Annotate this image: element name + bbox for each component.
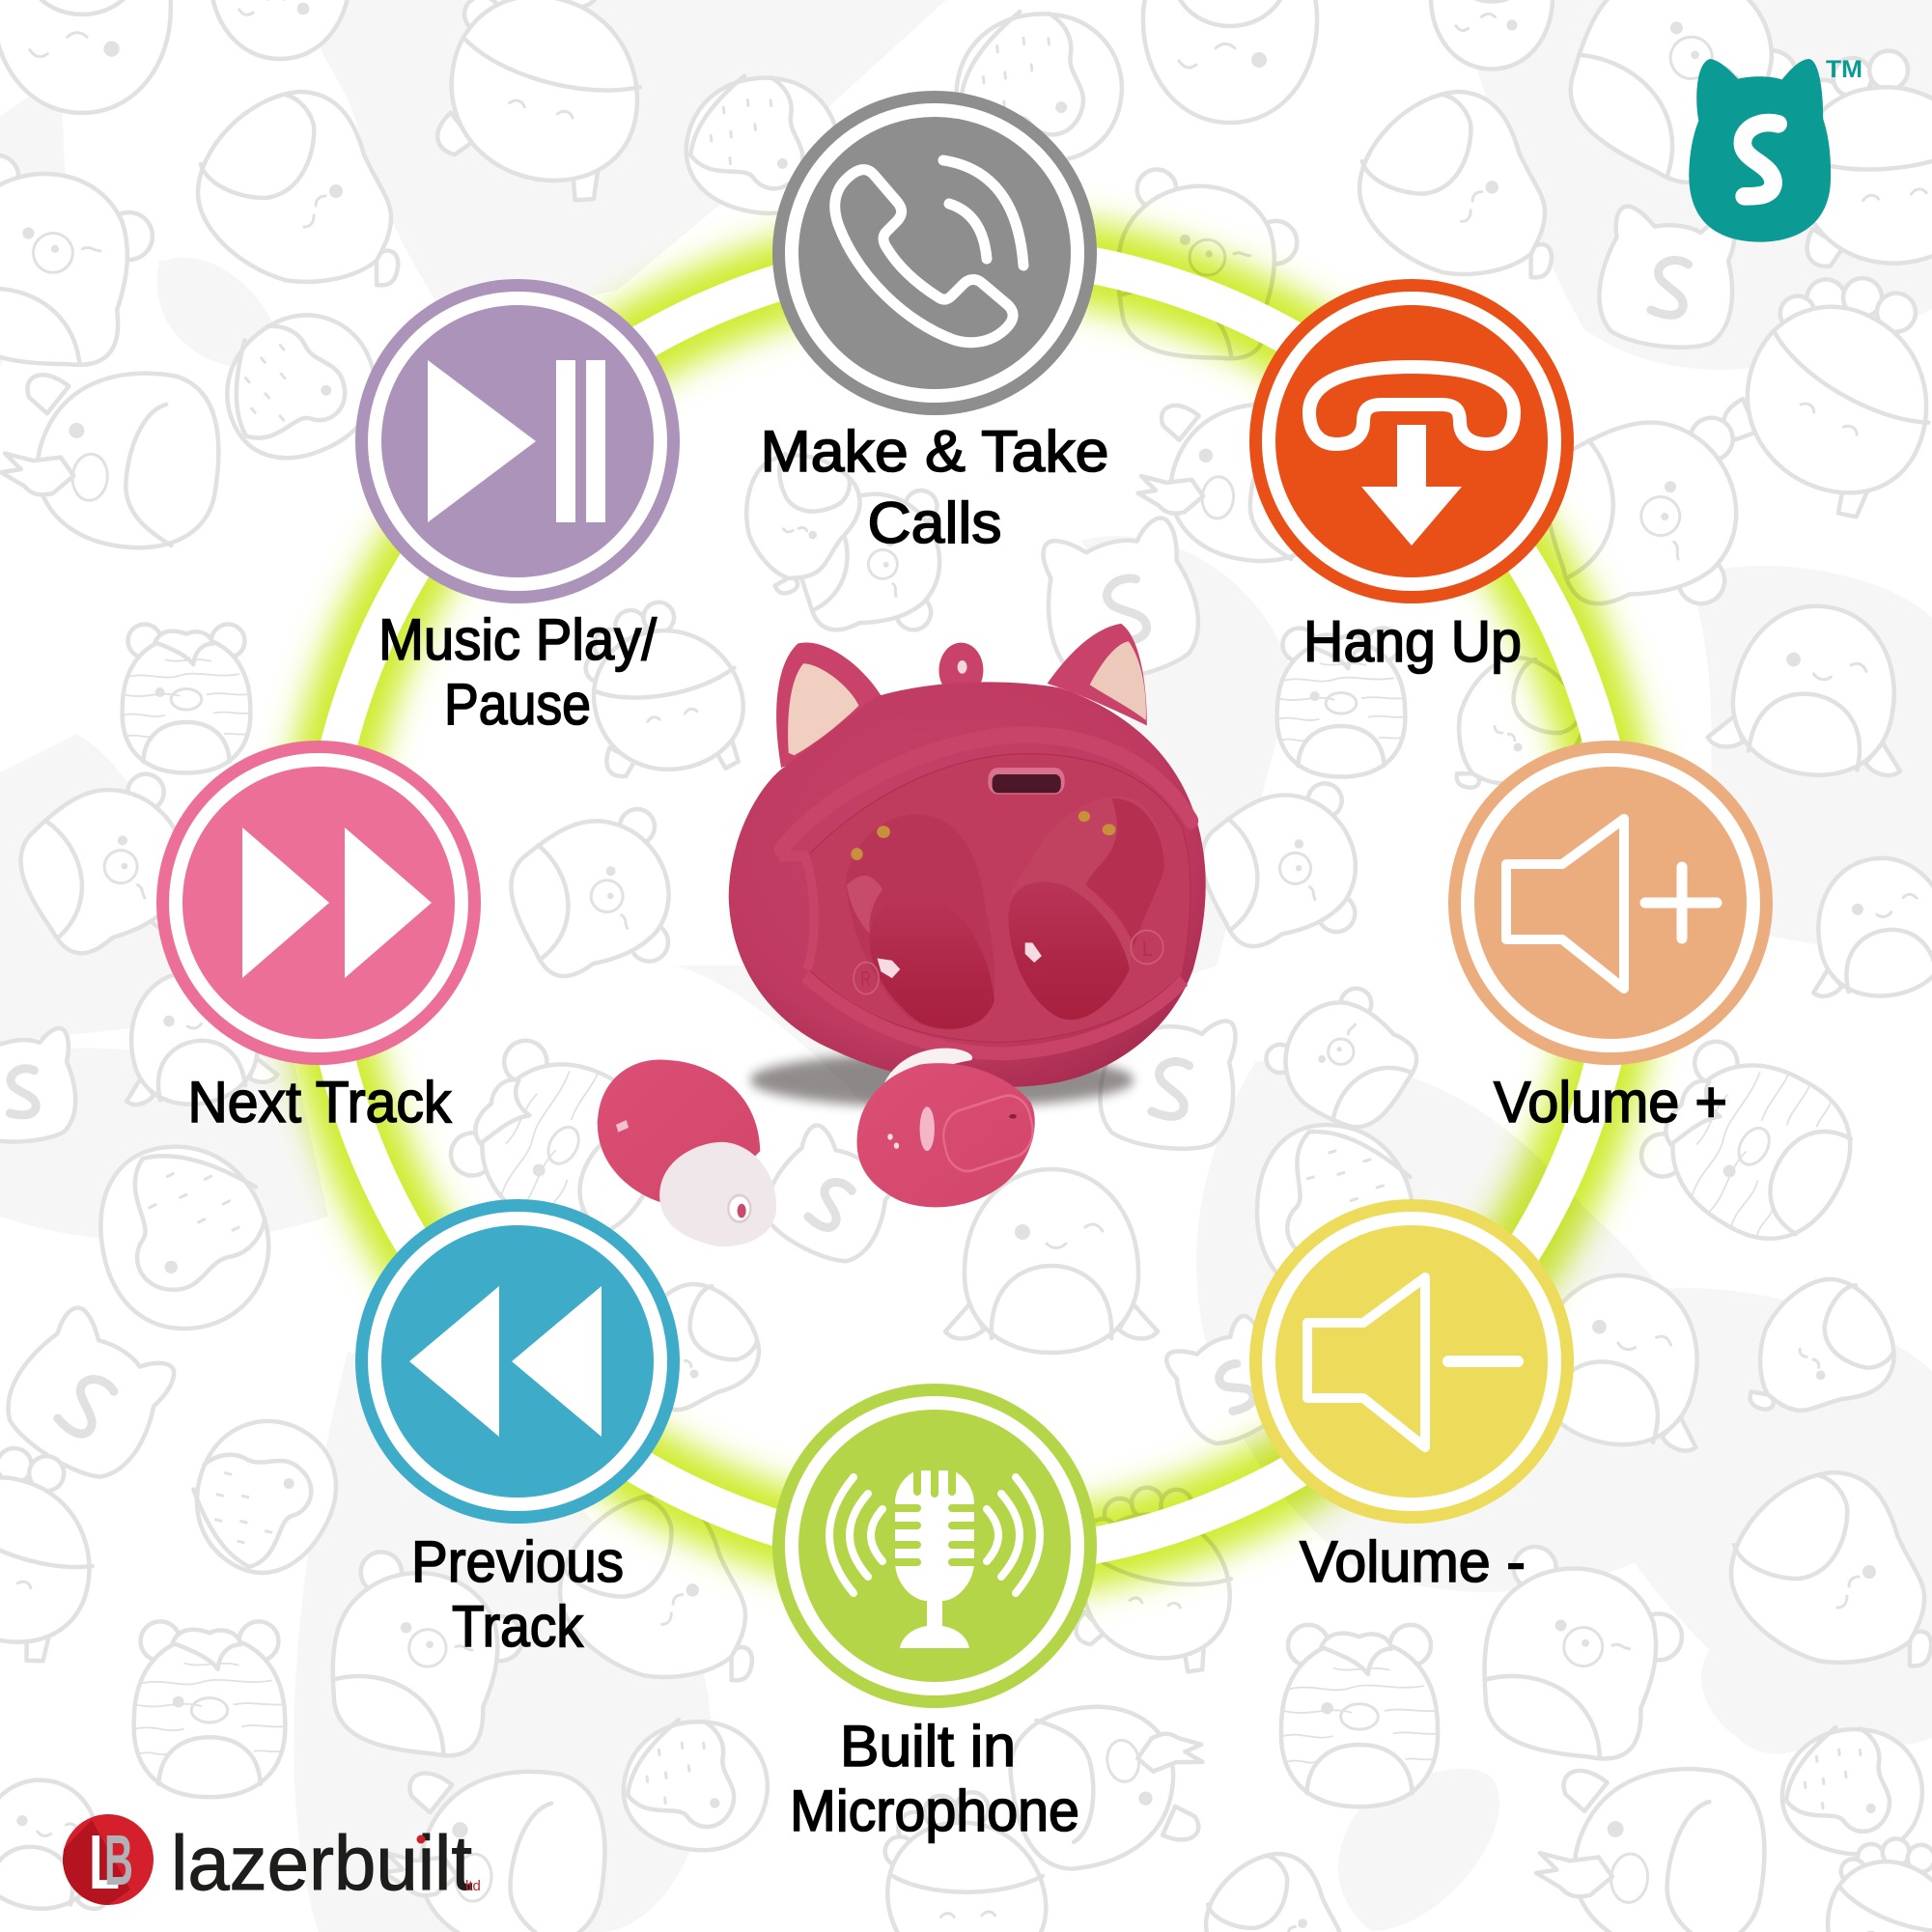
button: music play pause: [355, 279, 680, 737]
label: music play pause: Music Play/: [378, 607, 657, 672]
icon: rewind: [409, 1286, 602, 1437]
label: next track: Next Track: [187, 1070, 452, 1134]
hanging loop: [938, 643, 983, 698]
right ear: [1048, 624, 1147, 725]
button: volume up: [1448, 741, 1773, 1134]
label: volume up: Volume +: [1494, 1070, 1727, 1134]
right earbud well: [1008, 797, 1164, 1020]
label: built in microphone: Microphone: [790, 1778, 1079, 1843]
label: music play pause: Pause: [444, 672, 591, 737]
label: previous track: Track: [452, 1594, 584, 1659]
trademark: TM: [1826, 56, 1862, 83]
product: charging case with earbuds: [598, 624, 1206, 1246]
squishmallows logo: [1689, 56, 1862, 242]
lazerbuilt logo: L: [89, 1819, 120, 1905]
L and R badges: L: [1142, 938, 1153, 962]
lazerbuilt logo: [63, 1814, 481, 1906]
left rim: [779, 856, 814, 969]
icon: speaker plus: [1506, 819, 1717, 989]
usb port: [988, 768, 1065, 795]
button: volume down: [1249, 1199, 1574, 1594]
label: make and take calls: [761, 419, 1108, 555]
lazerbuilt logo: lazerbuilt: [171, 1820, 472, 1906]
icon: speaker minus: [1307, 1277, 1518, 1447]
lazerbuilt logo: B: [104, 1820, 133, 1900]
case shadow: [750, 1052, 1134, 1107]
label: built in microphone: [790, 1714, 1079, 1843]
side earbud: [598, 1059, 776, 1246]
icon: microphone: [829, 1467, 1040, 1648]
icon: fast forward: [242, 827, 432, 978]
left ear: [776, 642, 881, 768]
button: previous track: [355, 1199, 680, 1659]
label: music play pause: [378, 607, 657, 737]
label: previous track: Previous: [411, 1529, 624, 1594]
lazerbuilt logo: ltd: [465, 1878, 481, 1894]
icon: play pause: [428, 360, 605, 522]
glowing ring connecting the buttons: [319, 254, 1622, 1557]
button: built in microphone: [772, 1384, 1097, 1843]
label: make and take calls: Calls: [867, 490, 1002, 555]
glossy highlights: [878, 942, 1042, 978]
button: make and take calls: [761, 91, 1108, 555]
label: volume down: Volume -: [1300, 1529, 1526, 1594]
L and R badges: [854, 931, 1163, 994]
button: next track: [156, 741, 481, 1134]
icon: receiver and down arrow: [1309, 367, 1514, 546]
label: make and take calls: Make & Take: [761, 419, 1108, 484]
upper rim highlight: [781, 735, 1191, 850]
lower lip: [805, 976, 1184, 1053]
front earbud: [857, 1049, 1038, 1207]
button: hang up: [1249, 279, 1574, 674]
charging contacts: [851, 811, 1115, 860]
label: hang up: Hang Up: [1303, 609, 1522, 674]
case opening: [807, 754, 1190, 1043]
label: built in microphone: Built in: [840, 1714, 1016, 1778]
L and R badges: R: [860, 968, 871, 992]
case body: [729, 682, 1206, 1087]
label: previous track: [411, 1529, 624, 1659]
icon: handset with signal arcs: [835, 160, 1023, 343]
left earbud well: [846, 814, 994, 1029]
